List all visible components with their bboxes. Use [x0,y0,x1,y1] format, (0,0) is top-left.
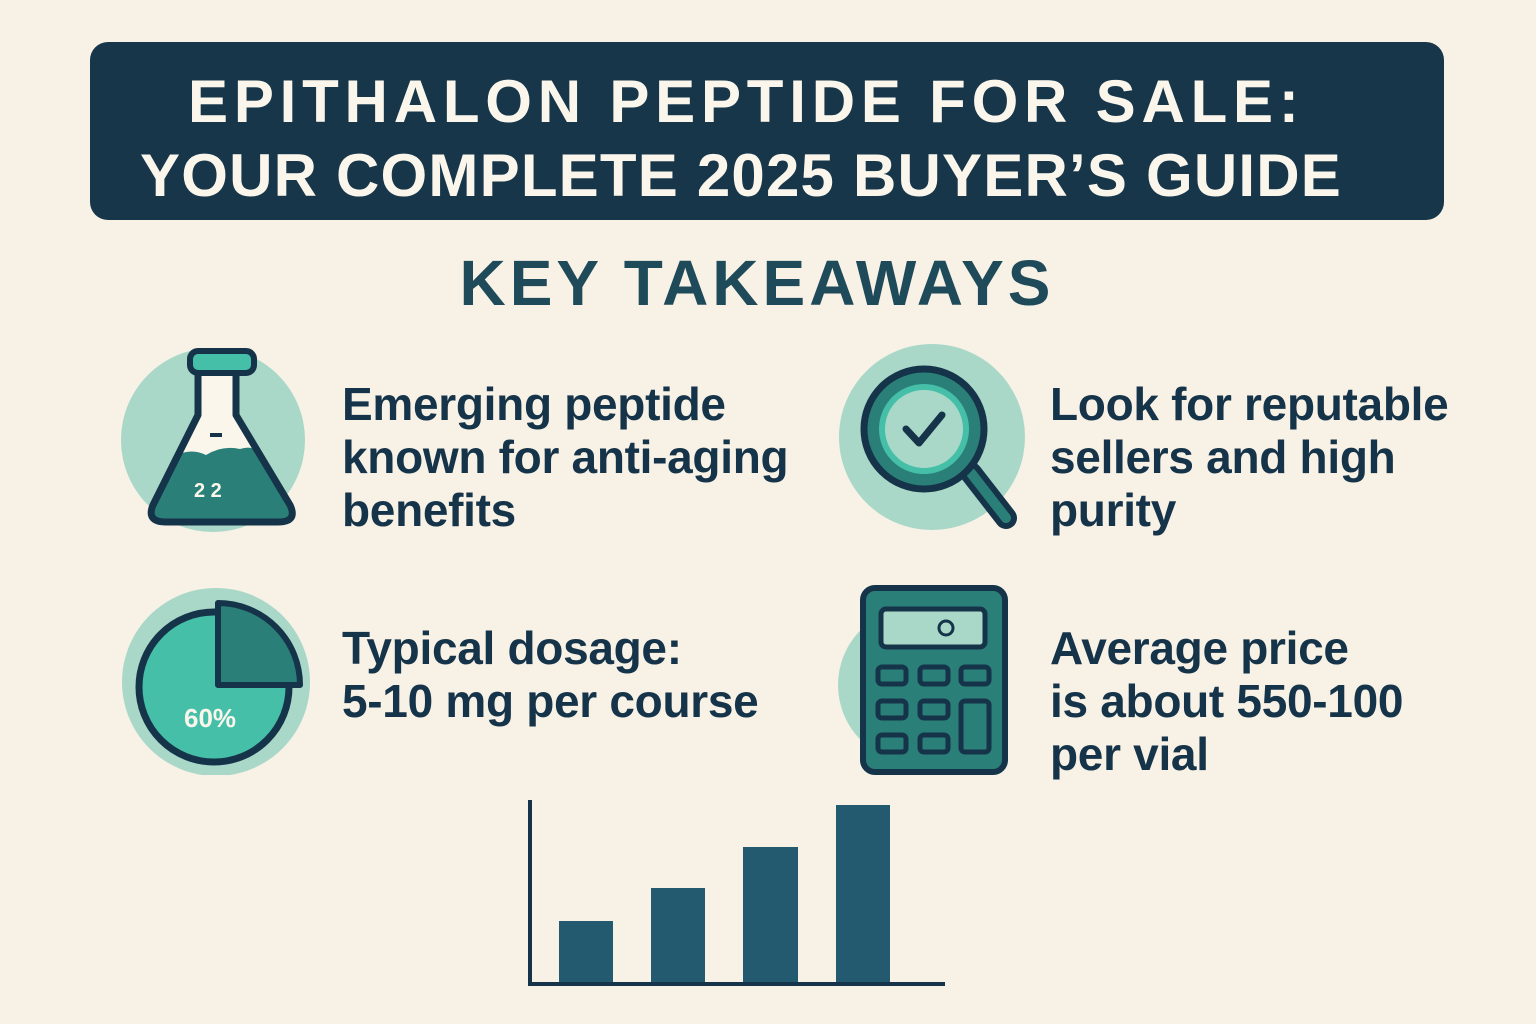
text: typical dosage: Typical dosage: [342,622,682,674]
icon: pie chart [122,588,310,775]
text: average price: per vial [1050,728,1209,780]
icon: flask [121,348,305,532]
icon: calculator [838,585,1008,775]
title banner [90,42,1444,220]
text: emerging peptide: Emerging peptide [342,378,726,430]
icon: flask: 2 2 [194,480,222,502]
text: emerging peptide: benefits [342,484,516,536]
text: average price [1050,622,1403,780]
text: average price: Average price [1050,622,1349,674]
heading: key takeaways: KEY TAKEAWAYS [460,247,1054,319]
bar chart [528,800,945,986]
title banner: YOUR COMPLETE 2025 BUYER’S GUIDE [140,142,1342,209]
icon: magnifier [839,344,1025,530]
text: emerging peptide: known for anti-aging [342,431,788,483]
text: emerging peptide [342,378,788,536]
text: reputable sellers: Look for reputable [1050,378,1448,430]
text: typical dosage [342,622,758,727]
text: average price: is about 550-100 [1050,675,1403,727]
text: typical dosage: 5-10 mg per course [342,675,758,727]
title banner: EPITHALON PEPTIDE FOR SALE: [188,68,1305,135]
text: reputable sellers: purity [1050,484,1176,536]
text: reputable sellers [1050,378,1448,536]
text: reputable sellers: sellers and high [1050,431,1395,483]
icon: pie chart: 60% [184,703,236,733]
